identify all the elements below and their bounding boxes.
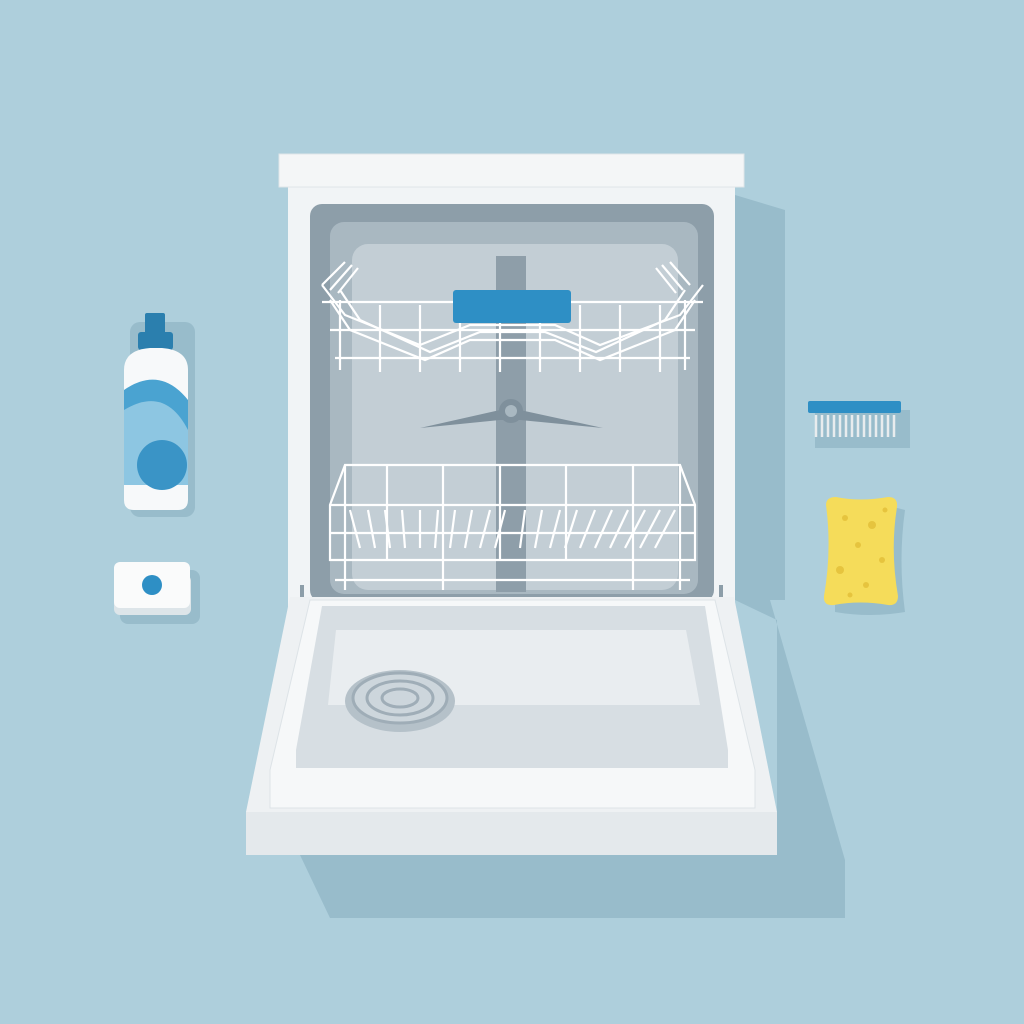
countertop: [279, 154, 744, 187]
shadow: dishwasher: [300, 195, 845, 918]
blue tag: [453, 290, 571, 323]
dishwasher body: [279, 154, 744, 633]
inner cavity: [310, 204, 714, 602]
bottom rack: [330, 465, 695, 590]
dishwasher tablet: [114, 562, 200, 624]
spray arm: [420, 399, 603, 428]
spray pipe: [496, 256, 526, 592]
top rack: [322, 262, 703, 372]
hinges: [300, 585, 304, 615]
door: [246, 597, 777, 855]
sponge: [824, 497, 905, 615]
brush: [808, 401, 910, 448]
bottle: [124, 313, 195, 517]
drain: [345, 670, 455, 732]
